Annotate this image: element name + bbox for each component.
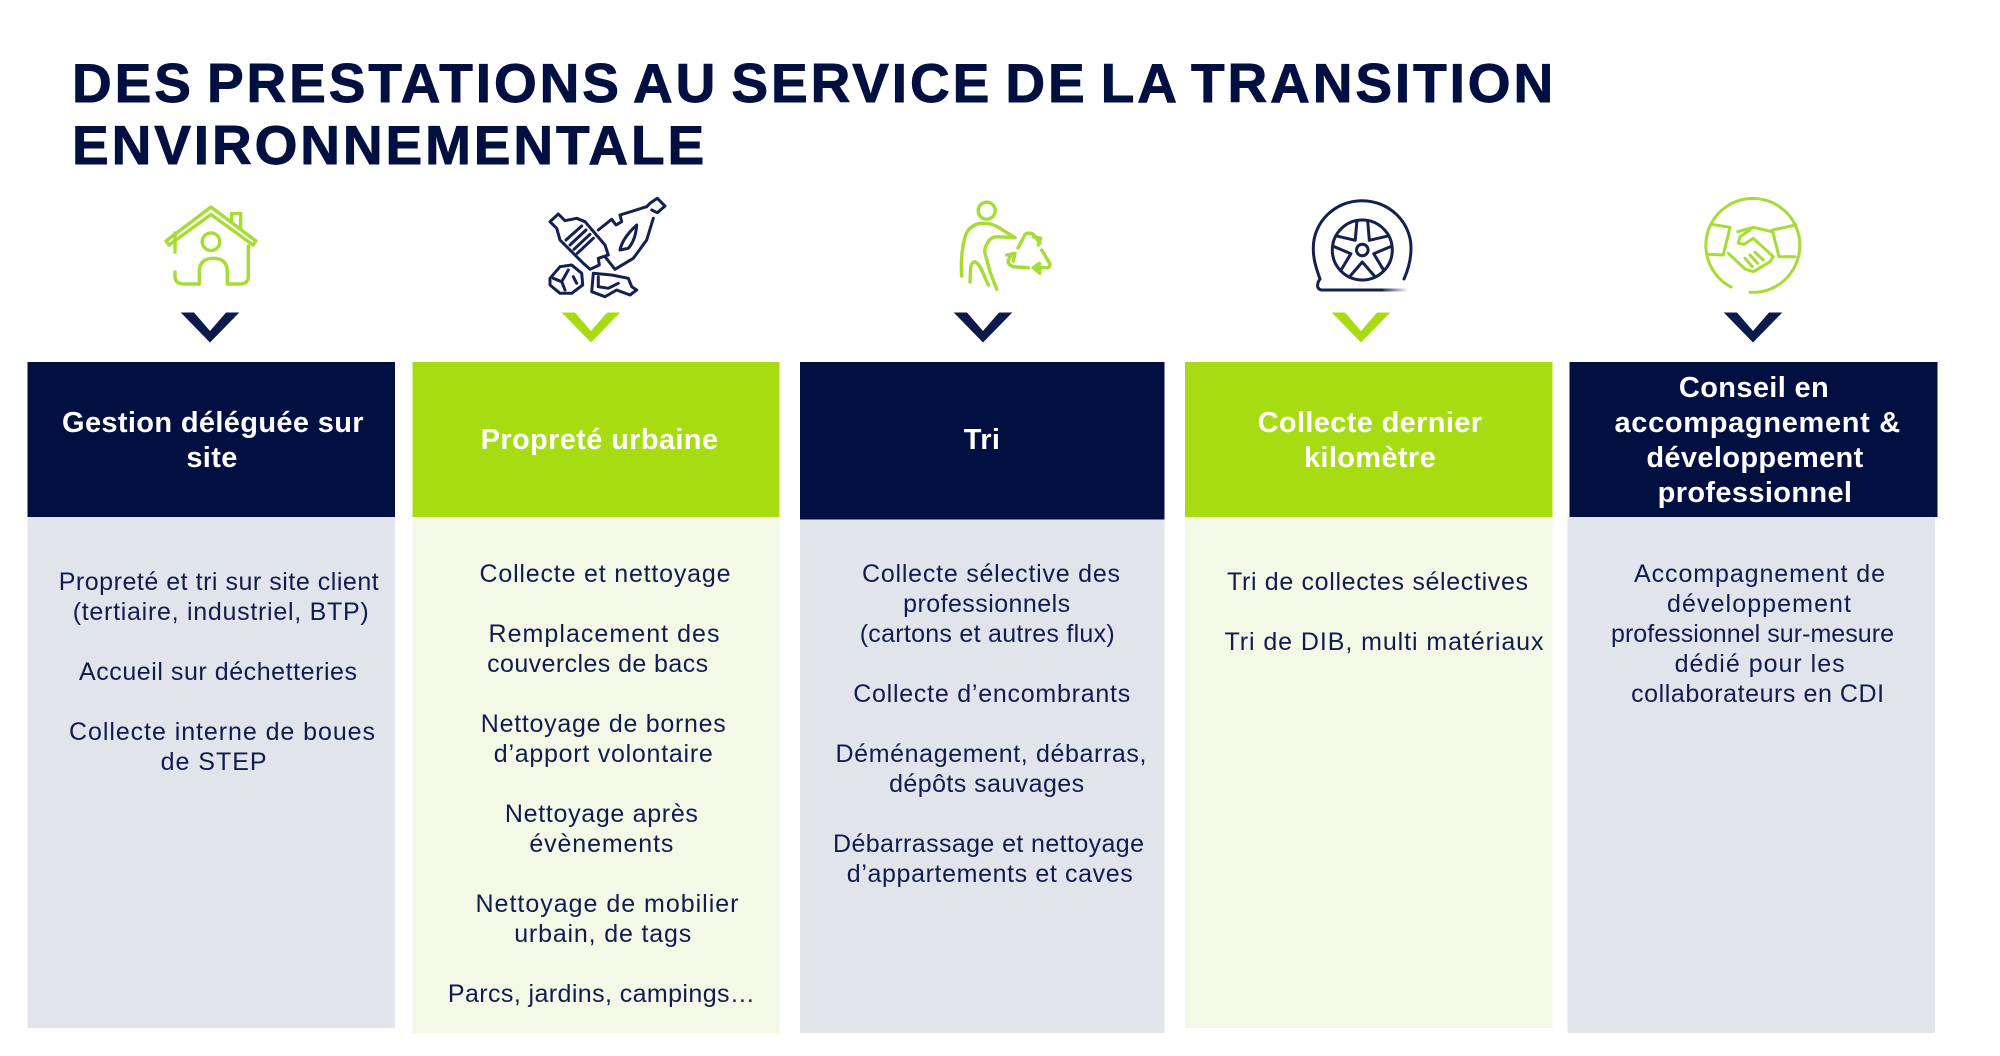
header: Propreté urbaine	[412, 362, 780, 517]
panel: Conseil en accompagnement	[1568, 362, 1938, 1033]
panel: Collecte dernier kilomètre	[1185, 362, 1552, 1028]
list: services collecte: Tri de collectes sélectives	[1227, 568, 1528, 596]
list: services propreté urbaine	[412, 517, 780, 1033]
panel: Propreté urbaine	[412, 362, 780, 1033]
title	[72, 52, 1556, 176]
list: services propreté urbaine: urbain, de tags	[514, 920, 691, 948]
list: services conseil	[1568, 517, 1935, 1033]
header: Propreté urbaine: Propreté urbaine	[481, 424, 718, 456]
title: ENVIRONNEMENTALE	[72, 114, 707, 176]
header: Conseil en accompagnement et développement professionnel: accompagnement &	[1614, 407, 1900, 439]
list: services gestion déléguée: Collecte interne de boues	[69, 718, 375, 746]
title: DES PRESTATIONS AU SERVICE DE LA TRANSITION	[72, 52, 1556, 114]
panel: Gestion déléguée sur site	[28, 362, 395, 1028]
list: services collecte	[1185, 517, 1552, 1028]
panel: Tri	[800, 362, 1164, 1033]
icon: flat tyre	[1313, 201, 1411, 290]
list: services tri: d’appartements et caves	[847, 860, 1133, 888]
header: Conseil en accompagnement et développement professionnel: développement	[1646, 442, 1864, 474]
arrow: chevron 1	[181, 312, 239, 342]
icon: handshake in circle	[1706, 198, 1800, 292]
list: services tri	[800, 520, 1164, 1033]
list: services gestion déléguée: Propreté et tri sur site client	[59, 568, 379, 596]
list: services gestion déléguée	[28, 517, 395, 1028]
arrow: chevron 3	[954, 312, 1012, 342]
list: services collecte: Tri de DIB, multi matériaux	[1224, 628, 1544, 656]
list: services tri: Déménagement, débarras,	[836, 740, 1146, 768]
list: services propreté urbaine: Remplacement des	[488, 620, 720, 648]
list: services conseil: collaborateurs en CDI	[1631, 680, 1884, 708]
list: services propreté urbaine: Nettoyage de bornes	[481, 710, 726, 738]
header: Gestion déléguée sur site	[28, 362, 395, 517]
list: services conseil: dédié pour les	[1675, 650, 1845, 678]
list: services propreté urbaine: couvercles de bacs	[487, 650, 708, 678]
header: Conseil en accompagnement et développement professionnel: Conseil en	[1679, 372, 1829, 404]
header: Tri	[800, 362, 1164, 520]
icon: house with person	[166, 207, 256, 284]
list: services gestion déléguée: Accueil sur déchetteries	[79, 658, 357, 686]
icon: person sorting with recycling symbol	[961, 202, 1050, 289]
list: services propreté urbaine: Parcs, jardins, campings…	[448, 980, 755, 1008]
list: services propreté urbaine: Collecte et nettoyage	[480, 560, 730, 588]
header: Collecte dernier kilomètre: Collecte dernier	[1258, 407, 1482, 439]
list: services gestion déléguée: de STEP	[161, 748, 267, 776]
header: Tri: Tri	[964, 424, 1000, 456]
header: Gestion déléguée sur site: Gestion déléguée sur	[62, 407, 364, 439]
list: services propreté urbaine: Nettoyage après	[505, 800, 698, 828]
list: services tri: professionnels	[903, 590, 1070, 618]
header: Collecte dernier kilomètre	[1185, 362, 1552, 517]
arrow: chevron 4	[1332, 312, 1390, 342]
list: services conseil: développement	[1667, 590, 1851, 618]
list: services propreté urbaine: d’apport volontaire	[494, 740, 713, 768]
list: services tri: dépôts sauvages	[889, 770, 1084, 798]
list: services conseil: Accompagnement de	[1634, 560, 1885, 588]
header: Conseil en accompagnement et développement professionnel	[1570, 362, 1938, 517]
arrow: chevron 2	[562, 312, 620, 342]
list: services conseil: professionnel sur-mesure	[1611, 620, 1894, 648]
list: services propreté urbaine: évènements	[529, 830, 673, 858]
arrow: chevron 5	[1724, 312, 1782, 342]
list: services propreté urbaine: Nettoyage de mobilier	[476, 890, 738, 918]
list: services tri: Collecte d’encombrants	[853, 680, 1130, 708]
header: Gestion déléguée sur site: site	[186, 442, 238, 474]
list: services gestion déléguée: (tertiaire, industriel, BTP)	[73, 598, 369, 626]
header: Collecte dernier kilomètre: kilomètre	[1304, 442, 1436, 474]
list: services tri: (cartons et autres flux)	[860, 620, 1115, 648]
header: Conseil en accompagnement et développement professionnel: professionnel	[1658, 477, 1852, 509]
list: services tri: Débarrassage et nettoyage	[833, 830, 1144, 858]
list: services tri: Collecte sélective des	[862, 560, 1120, 588]
icon: plastic bottles and crumpled waste	[550, 198, 665, 297]
